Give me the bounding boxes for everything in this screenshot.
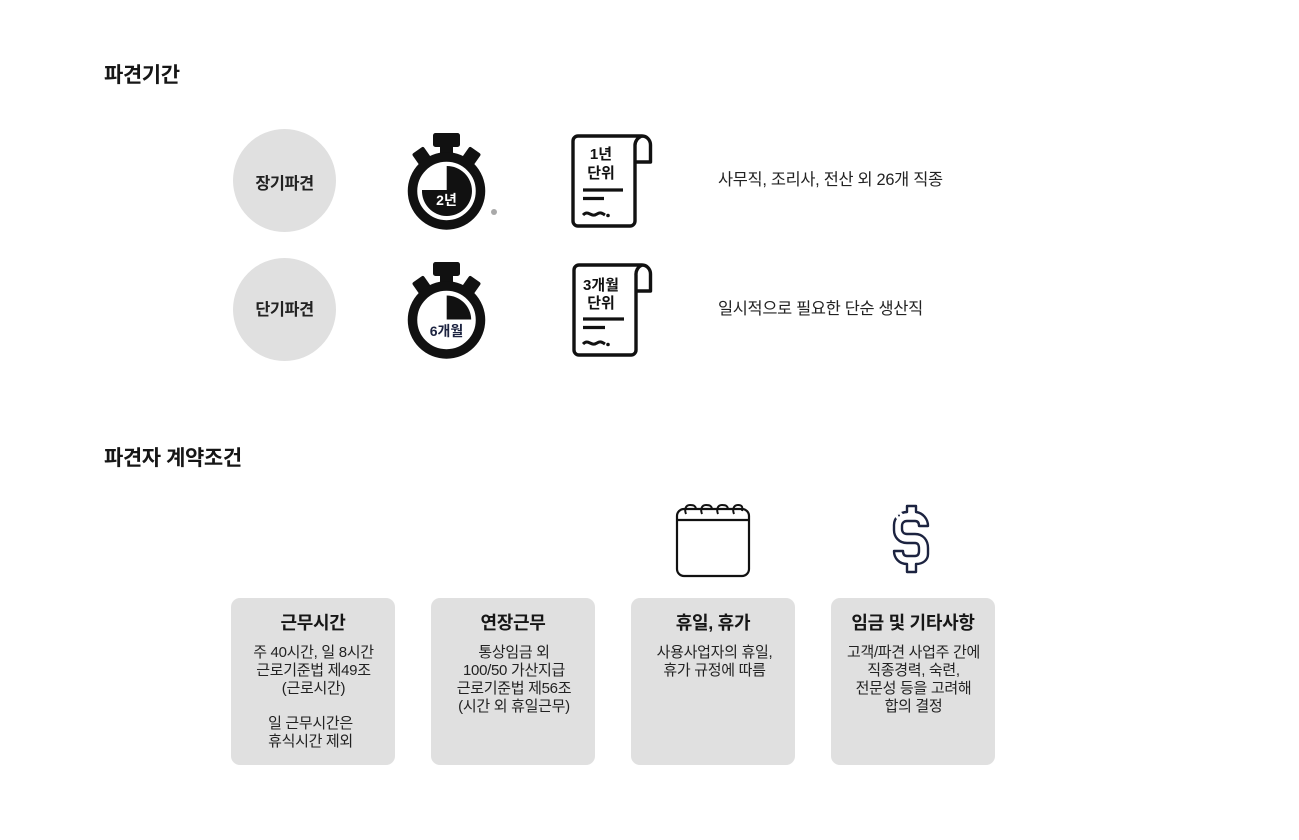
icon: document 1 year unit: 1년 bbox=[590, 146, 612, 163]
panel heading: wages: 임금 및 기타사항 bbox=[851, 613, 975, 633]
panel text: wages bbox=[847, 644, 980, 715]
panel text: working hours: 일 근무시간은 bbox=[268, 715, 353, 732]
badge: long-term dispatch bbox=[233, 129, 336, 232]
panel heading: working hours: 근무시간 bbox=[280, 613, 346, 633]
heading: contract terms: 파견자 계약조건 bbox=[104, 447, 242, 470]
panel text: holidays bbox=[657, 644, 772, 679]
panel text: working hours: (근로시간) bbox=[282, 680, 345, 697]
panel text: wages: 고객/파견 사업주 간에 bbox=[847, 644, 980, 661]
panel: wages and other bbox=[831, 598, 995, 765]
panel text: overtime bbox=[457, 644, 571, 715]
panel text: holidays: 휴가 규정에 따름 bbox=[663, 662, 766, 679]
panel: overtime bbox=[431, 598, 595, 765]
panel text: working hours: 주 40시간, 일 8시간 bbox=[253, 644, 374, 661]
panel text: overtime: (시간 외 휴일근무) bbox=[458, 698, 570, 715]
description: short-term jobs: 일시적으로 필요한 단순 생산직 bbox=[718, 300, 923, 318]
small grey dot bbox=[491, 209, 497, 215]
badge: short-term dispatch: 단기파견 bbox=[255, 301, 314, 319]
panel text: wages: 직종경력, 숙련, bbox=[867, 662, 960, 679]
badge: short-term dispatch bbox=[233, 258, 336, 361]
panel: holidays and leave bbox=[631, 598, 795, 765]
panel text: working hours: 휴식시간 제외 bbox=[268, 733, 353, 750]
panel text: holidays: 사용사업자의 휴일, bbox=[657, 644, 772, 661]
panel text: overtime: 100/50 가산지급 bbox=[463, 662, 565, 679]
heading: dispatch period: 파견기간 bbox=[104, 64, 180, 87]
panel heading: holidays: 휴일, 휴가 bbox=[676, 613, 750, 633]
icon: document 3 month unit: 3개월 bbox=[583, 277, 619, 294]
icon: document 1 year unit: 단위 bbox=[587, 165, 615, 182]
panel text: wages: 전문성 등을 고려해 bbox=[856, 680, 971, 697]
icon: stopwatch 2 years: 2년 bbox=[436, 192, 457, 208]
panel text: working hours bbox=[253, 644, 374, 750]
panel text: working hours: 근로기준법 제49조 bbox=[256, 662, 371, 679]
panel text: overtime: 통상임금 외 bbox=[478, 644, 550, 661]
icon: stopwatch 6 months: 6개월 bbox=[430, 323, 463, 339]
description: long-term jobs: 사무직, 조리사, 전산 외 26개 직종 bbox=[718, 171, 943, 189]
icon: document 3 month unit: 단위 bbox=[587, 295, 615, 312]
panel text: overtime: 근로기준법 제56조 bbox=[457, 680, 571, 697]
panel: working hours bbox=[231, 598, 395, 765]
badge: long-term dispatch: 장기파견 bbox=[255, 175, 314, 193]
panel heading: overtime: 연장근무 bbox=[480, 613, 546, 633]
panel text: wages: 합의 결정 bbox=[885, 698, 942, 715]
